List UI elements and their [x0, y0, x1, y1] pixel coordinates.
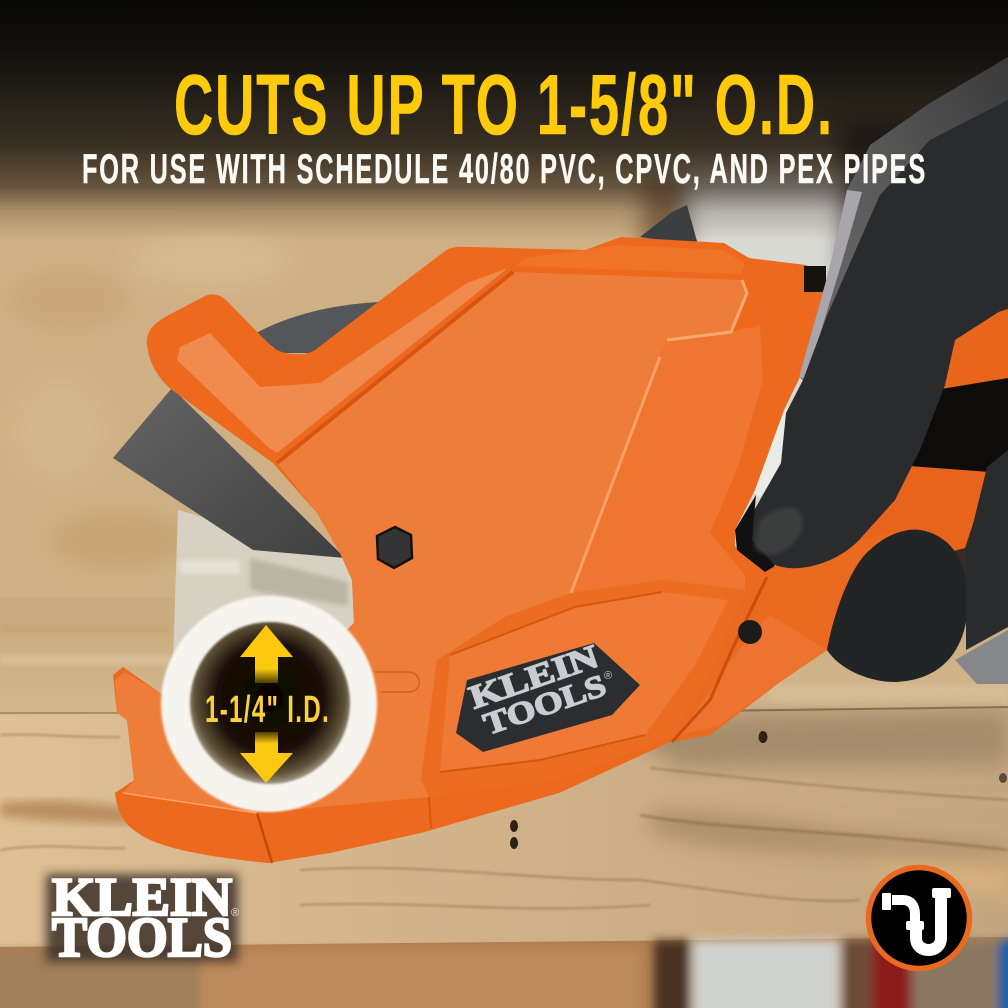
top ridge highlight — [515, 245, 745, 274]
tool badge logo: TOOLS — [479, 667, 610, 742]
ridge strip behind notch — [177, 268, 508, 453]
board front face — [0, 707, 1008, 947]
right panel — [571, 325, 763, 593]
window behind the thumb — [750, 404, 788, 497]
badge frame panel — [421, 580, 745, 797]
pipe end with inner dimension — [161, 596, 377, 812]
pipe wall — [161, 596, 377, 812]
panel ridge lines — [123, 272, 767, 863]
tool badge logo: KLEIN — [465, 639, 603, 717]
main textured panel — [115, 272, 747, 813]
cuff light stripe — [799, 190, 862, 380]
pivot bolt — [738, 620, 762, 644]
pipe bore — [190, 622, 350, 784]
thumb shadow — [735, 495, 775, 572]
index finger — [746, 100, 1008, 568]
fingertip highlight — [754, 507, 803, 555]
cuff — [799, 57, 1008, 385]
back blade tip — [640, 205, 698, 245]
lower blade — [113, 388, 345, 558]
board top surface — [0, 598, 1008, 718]
arrow down — [240, 732, 293, 783]
ring finger — [966, 450, 1008, 650]
wooden board — [0, 598, 1008, 947]
upper handle — [930, 309, 1008, 390]
arrow up — [240, 625, 293, 683]
glove — [735, 57, 1008, 684]
inner badge panel — [440, 592, 728, 772]
glove wrist — [955, 630, 1008, 684]
white pipe body — [172, 510, 356, 690]
Klein Tools logo: KLEIN — [52, 867, 232, 927]
hex bolt — [377, 527, 412, 568]
tool badge logo: ® — [604, 670, 612, 682]
knot holes — [510, 731, 1007, 849]
icon: plumbing pipe badge — [868, 868, 970, 968]
orange tool body — [113, 237, 905, 863]
blurred floor below board — [0, 937, 1008, 1008]
inner diameter label: 1-1/4" I.D. — [205, 689, 330, 731]
upper blade — [256, 302, 378, 353]
lever arm — [670, 530, 905, 742]
Klein Tools logo — [46, 867, 239, 969]
logo shadow — [46, 874, 238, 962]
arm facet — [680, 615, 827, 735]
tool badge logo — [456, 639, 640, 752]
middle finger — [827, 530, 968, 682]
Klein Tools logo: ® — [231, 907, 239, 919]
Klein Tools logo: TOOLS — [52, 907, 232, 969]
lower handle — [860, 466, 990, 575]
black pin behind cuff — [804, 266, 826, 292]
dark gap between handles — [890, 378, 1008, 480]
